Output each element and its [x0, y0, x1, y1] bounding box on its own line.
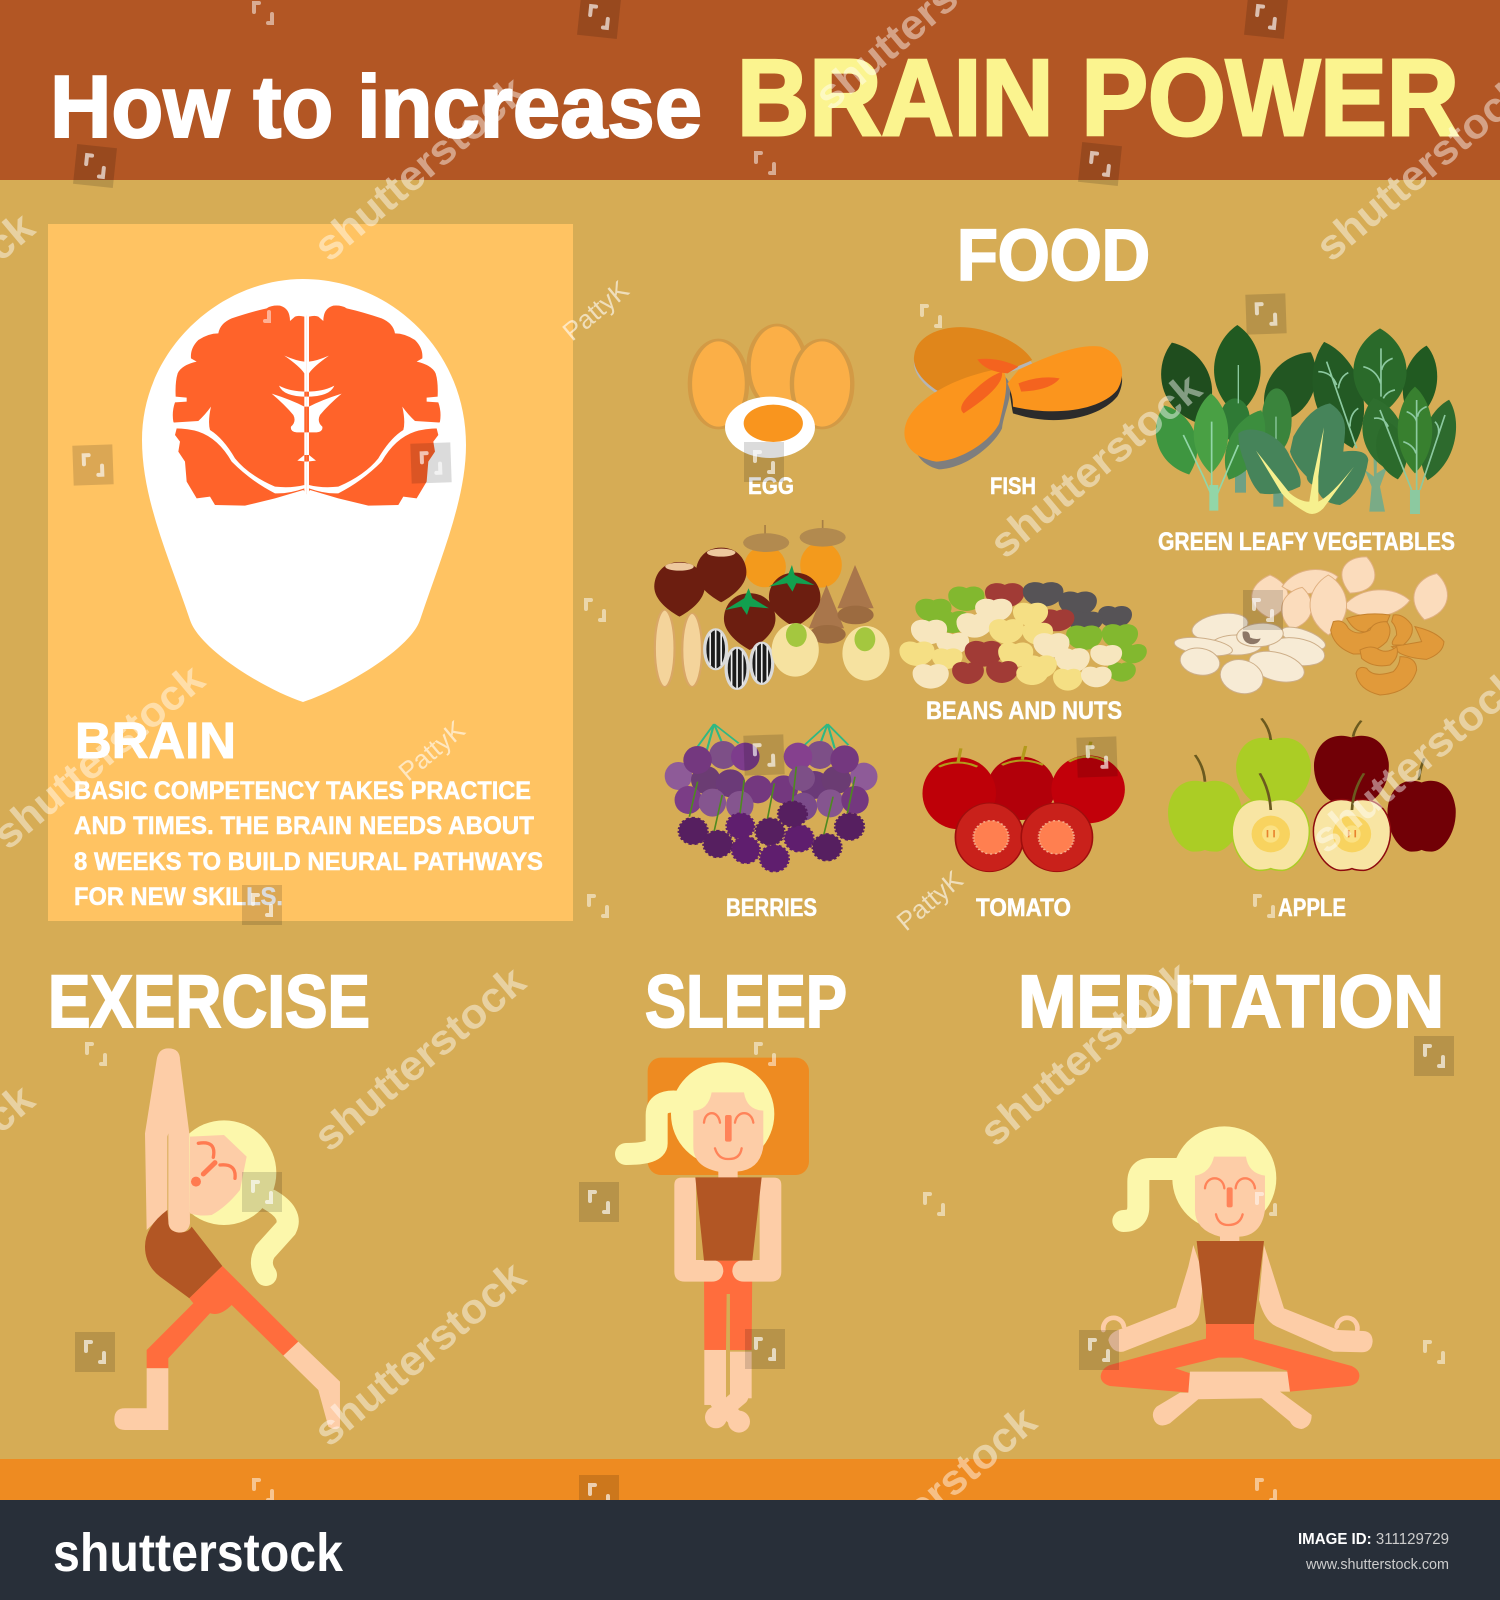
- footer url: www.shutterstock.com: [1305, 1556, 1449, 1573]
- title: how to increase: How to increase: [50, 57, 702, 156]
- text block: brain description: [74, 777, 543, 911]
- watermarks: PattyK: [557, 274, 635, 347]
- label: berries: BERRIES: [726, 894, 817, 922]
- pillow: [648, 1058, 809, 1175]
- heading: exercise: EXERCISE: [48, 960, 370, 1043]
- header band: [0, 0, 1500, 180]
- icon: fish: [904, 327, 1122, 469]
- icon: apple: [1168, 718, 1456, 870]
- icon: beans: [899, 582, 1147, 691]
- icon: brain: [172, 306, 441, 506]
- icon: green leafy vegetables: [1146, 325, 1465, 514]
- label: egg: EGG: [748, 473, 794, 500]
- text block: brain description: 8 WEEKS TO BUILD NEURAL PATHWAYS: [74, 848, 543, 876]
- heading: food: FOOD: [957, 216, 1150, 296]
- icon: head: [142, 279, 466, 702]
- label: fish: FISH: [990, 473, 1036, 500]
- figure: sleep: [626, 1058, 809, 1433]
- figure: meditation: [1101, 1126, 1373, 1429]
- icon: tomato: [922, 742, 1125, 872]
- panel: brain: [48, 224, 573, 921]
- bottom orange band: [0, 1459, 1500, 1500]
- icon: almonds and cashews: [1173, 550, 1453, 698]
- label: beans and nuts: BEANS AND NUTS: [926, 697, 1122, 725]
- footer logo: shutterstock: [53, 1523, 344, 1583]
- label: tomato: TOMATO: [976, 894, 1071, 922]
- text block: brain description: BASIC COMPETENCY TAKES PRACTICE: [74, 777, 531, 805]
- icon: berries: [665, 724, 878, 872]
- text block: brain description: AND TIMES. THE BRAIN NEEDS ABOUT: [74, 812, 534, 840]
- text block: brain description: FOR NEW SKILLS.: [74, 883, 283, 911]
- heading: brain: BRAIN: [75, 712, 236, 769]
- heading: sleep: SLEEP: [645, 960, 847, 1043]
- footer image id: IMAGE ID: 311129729: [1298, 1531, 1449, 1548]
- watermarks: PattyK: [891, 864, 969, 937]
- icon: egg: [690, 325, 852, 458]
- watermarks: PattyK: [393, 714, 471, 787]
- figure: exercise: [114, 1048, 340, 1430]
- icon: seeds and nuts: [654, 520, 890, 689]
- label: apple: APPLE: [1278, 894, 1346, 922]
- footer bar: [0, 1500, 1500, 1600]
- label: green leafy vegetables: GREEN LEAFY VEGETABLES: [1158, 528, 1455, 556]
- heading: meditation: MEDITATION: [1018, 960, 1444, 1043]
